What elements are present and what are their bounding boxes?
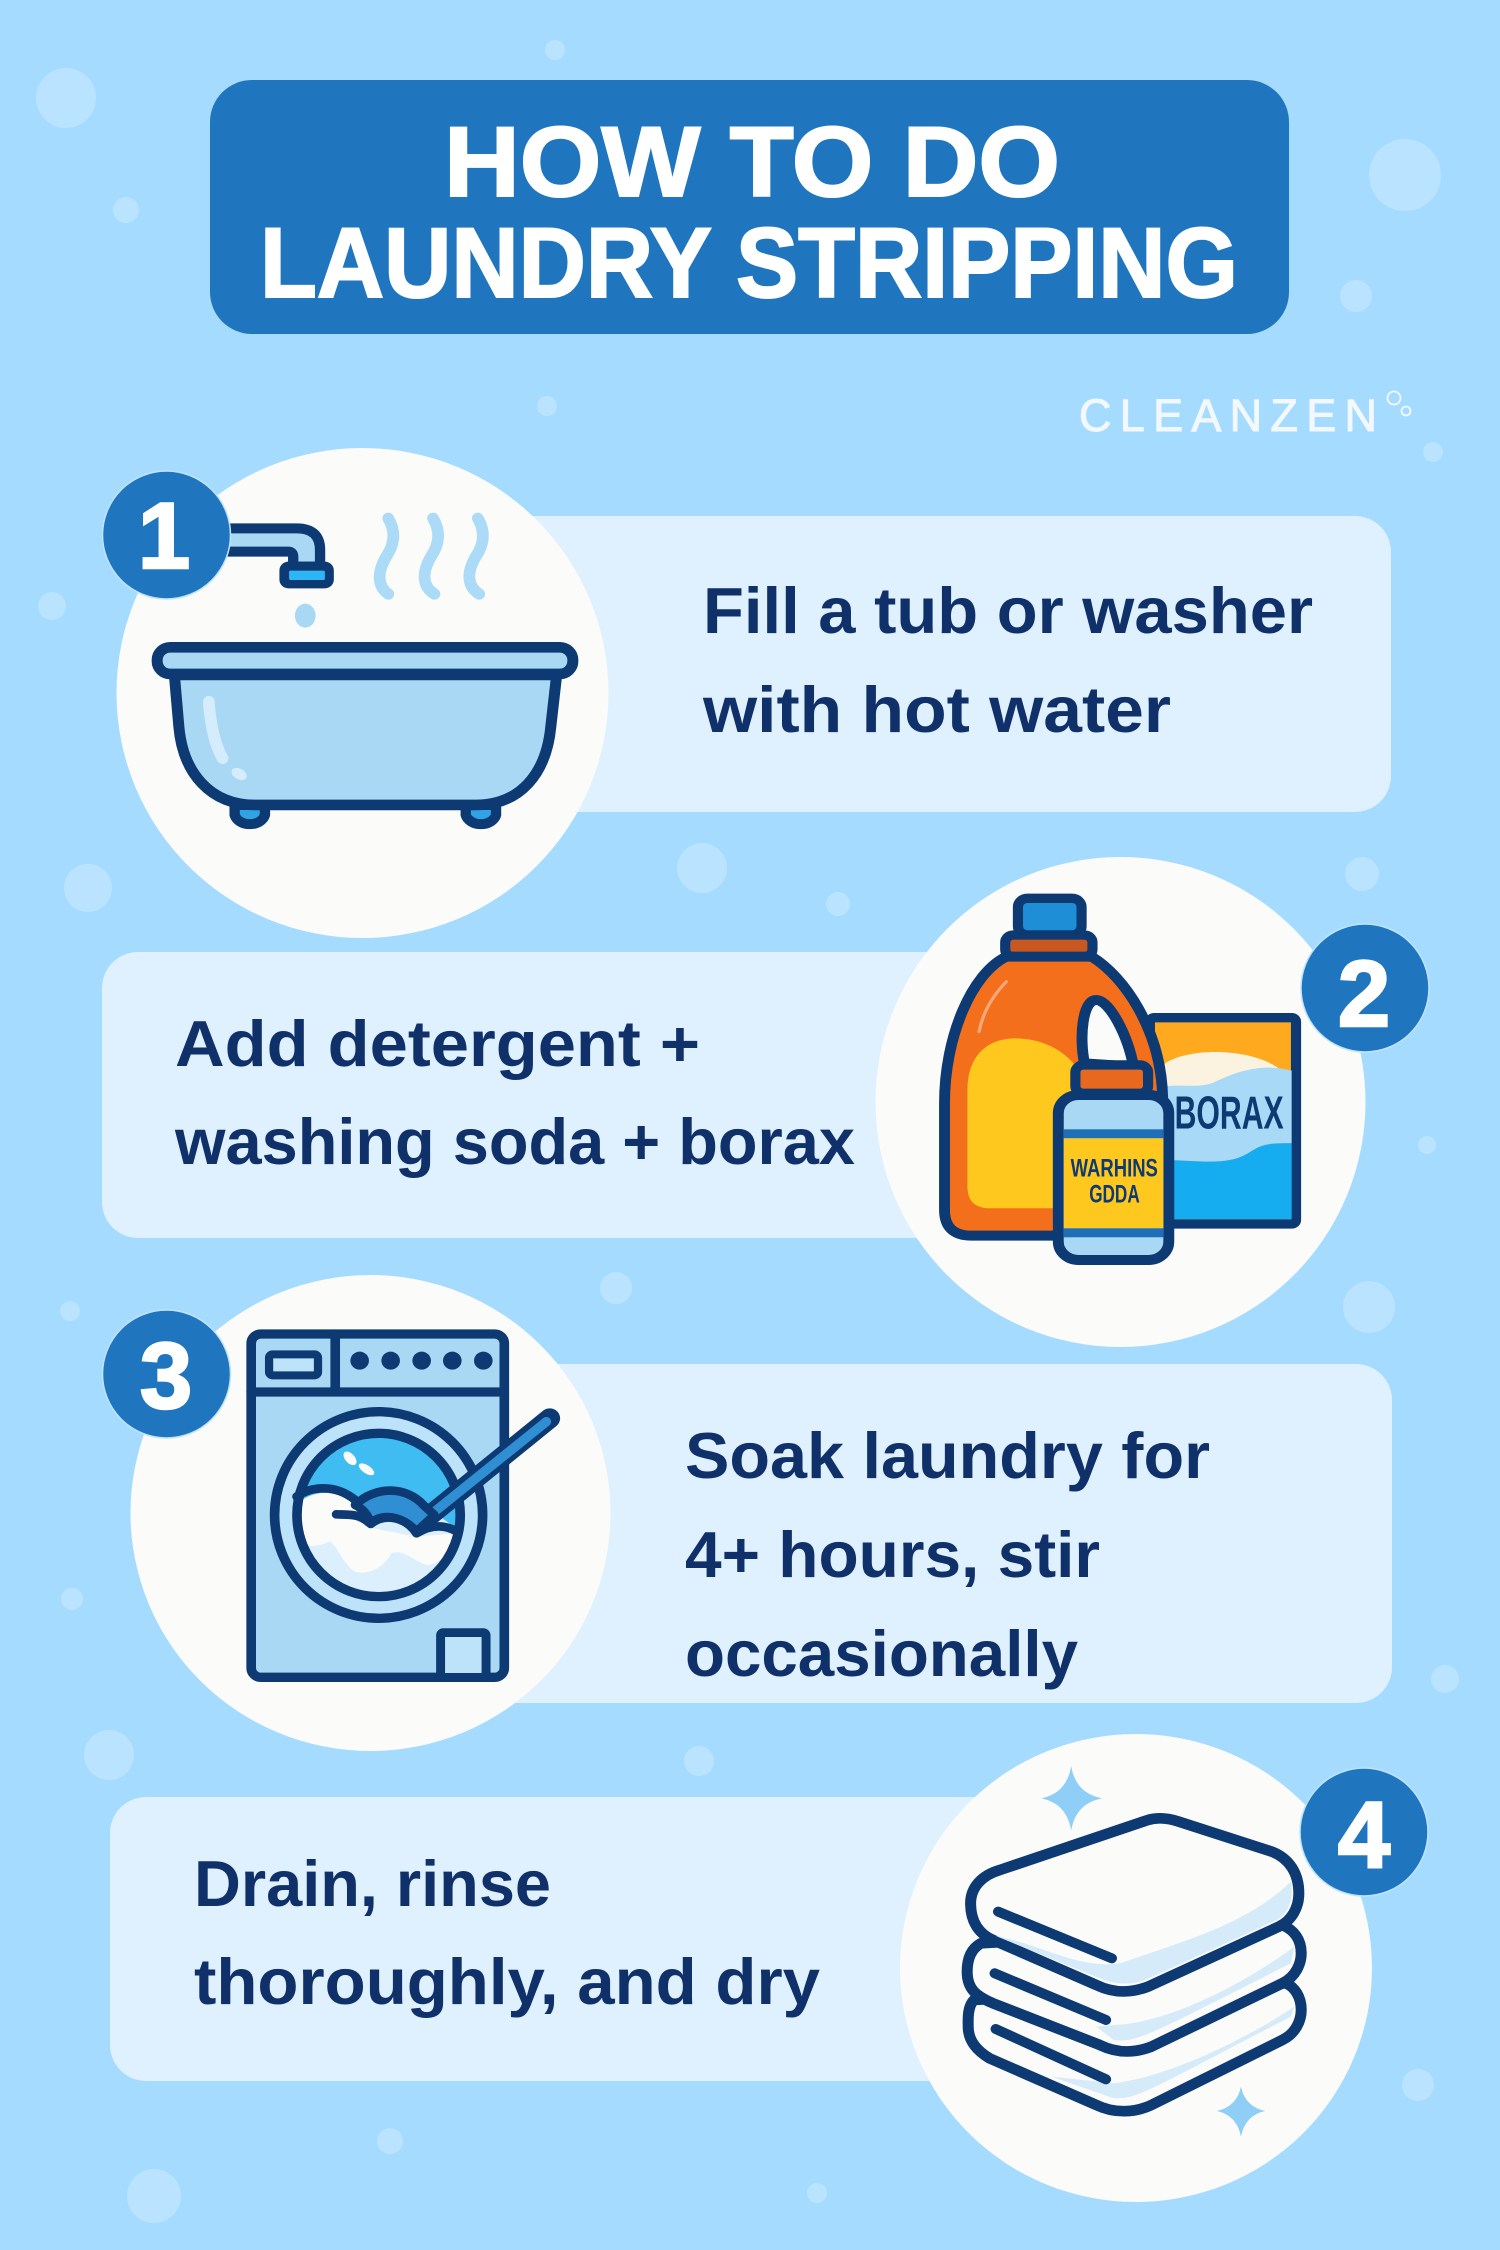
icon circle: step 3 [130,1275,610,1751]
step 3 text [685,1419,1210,1690]
tub feet [235,805,496,824]
bottom towel [968,1983,1301,2111]
small bottle: GDDA [1089,1180,1140,1208]
small bottle: WARHINS [1071,1154,1158,1182]
step 4 text [194,1847,820,2018]
title line 2: LAUNDRY STRIPPING [260,207,1238,318]
number badge 1: 1 [138,483,190,588]
control panel [251,1334,504,1392]
icon circle: step 4 [900,1734,1372,2202]
step 2 text: washing soda + borax [174,1105,855,1178]
step 2 [102,857,1429,1347]
number badge 2 [1301,924,1429,1052]
middle towel [967,1925,1301,2051]
drum window with foam [297,1433,460,1597]
detergent jug [945,898,1163,1236]
machine body [251,1334,504,1677]
step 3 text: 4+ hours, stir [685,1518,1100,1591]
panel: step 4 [110,1797,1010,2081]
icon: detergent bottles and borax box [945,898,1296,1260]
step 2 text [174,1007,855,1178]
steam [380,518,483,594]
number badge 4 [1300,1768,1428,1896]
step 3 text: Soak laundry for [685,1419,1210,1492]
step 1 text: with hot water [702,673,1171,746]
tub rim [157,647,573,674]
sparkles [1041,1766,1265,2137]
stirring paddle [355,1418,550,1532]
water drop [295,604,316,628]
title line 1: HOW TO DO [444,106,1060,217]
step 1 text: Fill a tub or washer [703,574,1313,647]
panel: step 3 [400,1364,1392,1703]
door ring [275,1412,483,1618]
number badge 3 [102,1310,230,1438]
step 1 text [702,574,1313,746]
tub highlights [209,702,249,783]
small bottle [1058,1065,1169,1260]
step 1 [102,448,1391,938]
step 4 [110,1734,1428,2202]
front hatch [441,1633,486,1677]
number badge 2: 2 [1338,941,1390,1046]
faucet [224,528,334,588]
top towel [971,1818,1299,1991]
step 3 text: occasionally [685,1617,1078,1690]
step 4 text: thoroughly, and dry [194,1945,820,2018]
number badge 3: 3 [140,1323,192,1428]
panel: step 2 [102,952,1002,1238]
icon circle: step 2 [876,857,1366,1347]
icon circle: step 1 [116,448,608,938]
logo: CLEANZEN: CLEANZEN [1079,390,1377,441]
borax box [1150,1018,1296,1224]
step 3 [102,1275,1392,1751]
panel: step 1 [400,516,1391,812]
number badge 4: 4 [1338,1782,1390,1887]
title banner [210,80,1289,334]
borax box: BORAX [1175,1088,1284,1139]
icon: washing machine [251,1334,550,1677]
tub body [174,675,557,805]
step 2 text: Add detergent + [175,1007,700,1080]
number badge 1 [102,471,230,599]
step 4 text: Drain, rinse [194,1847,551,1920]
icon: folded towels [967,1766,1301,2137]
icon: bathtub with faucet [157,518,573,824]
